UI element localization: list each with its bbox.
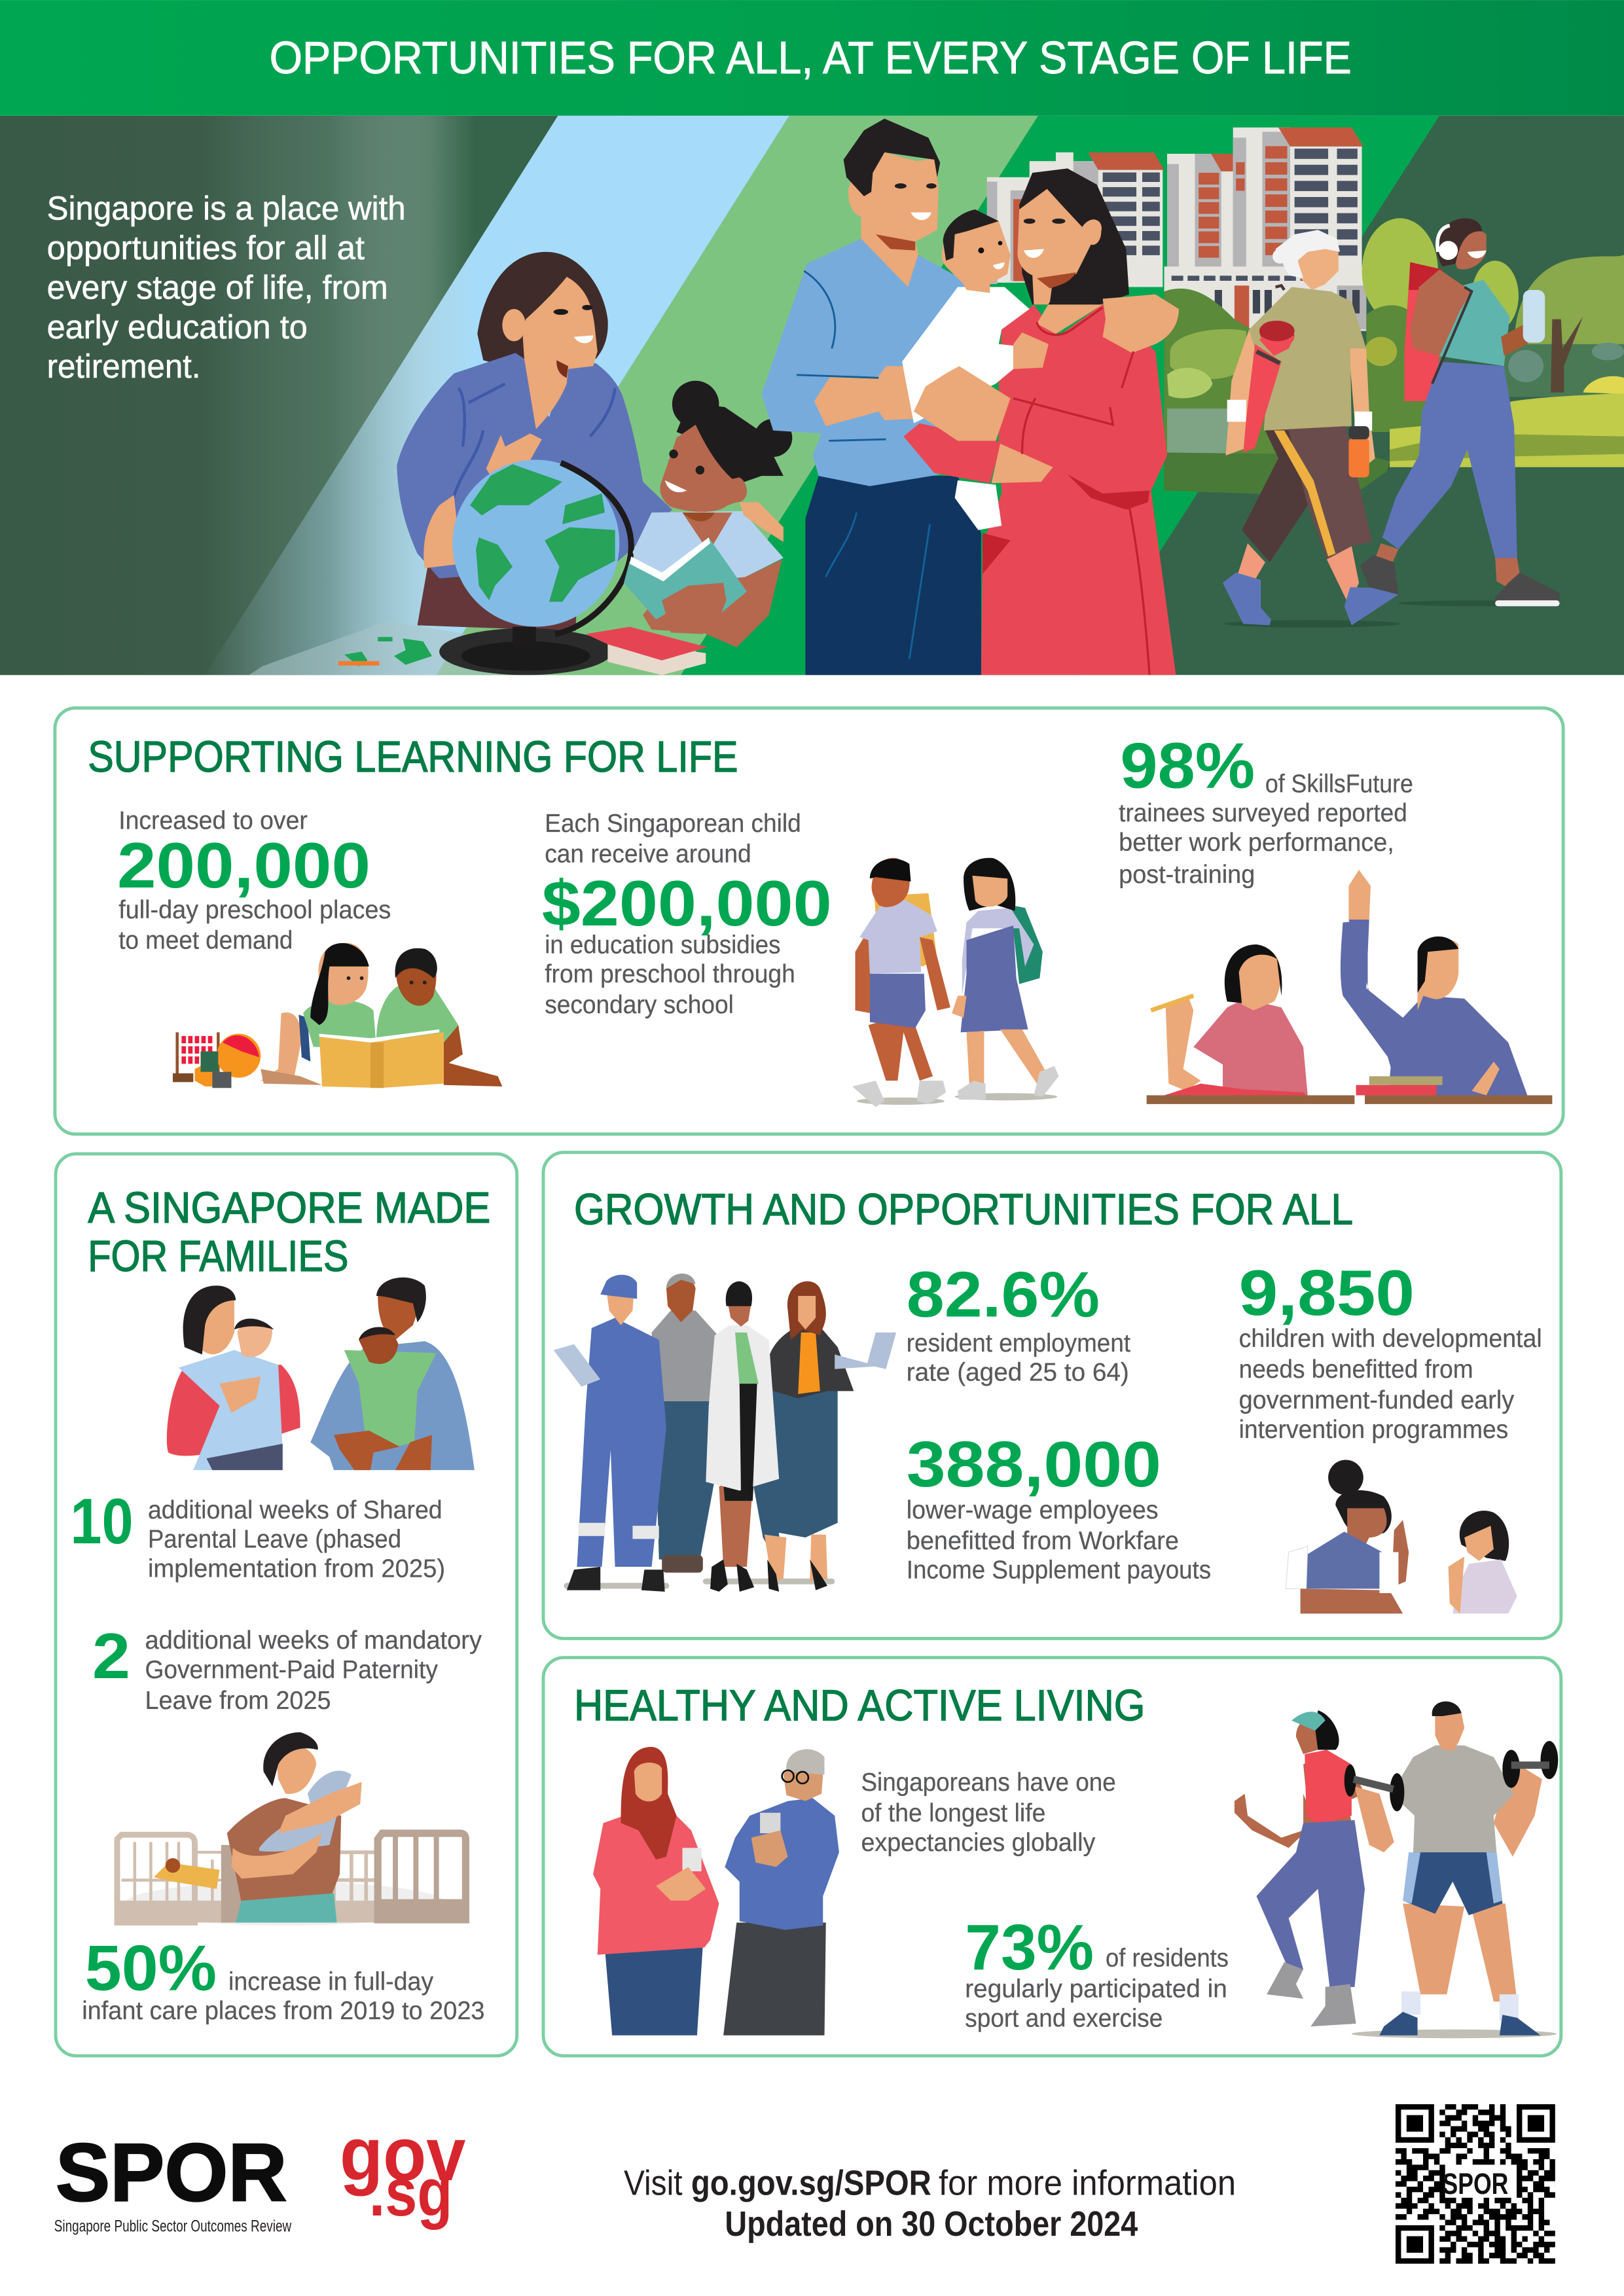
stat: preschool places	[117, 806, 391, 955]
stat: preschool places: Increased to over	[118, 806, 308, 834]
illustration: students walking	[852, 858, 1058, 1107]
QR code: SPOR	[1442, 2167, 1508, 2200]
heading: HEALTHY AND ACTIVE LIVING	[574, 1681, 1145, 1731]
stat: SkillsFuture: of SkillsFuture	[1265, 770, 1413, 798]
panel: supporting learning for life	[55, 708, 1563, 1134]
website note	[624, 2164, 1236, 2203]
stat: sport participation: of residents	[1106, 1945, 1229, 1973]
heading: SUPPORTING LEARNING FOR LIFE	[88, 732, 738, 781]
stat: employment rate: rate (aged 25 to 64)	[907, 1359, 1129, 1387]
footer	[54, 2104, 1561, 2264]
update date: Updated on 30 October 2024	[725, 2204, 1138, 2244]
stat: paternity leave: additional weeks of mandatory	[145, 1626, 482, 1655]
heading: GROWTH AND OPPORTUNITIES FOR ALL	[574, 1185, 1353, 1234]
stat: paternity leave: Government-Paid Paternity	[145, 1656, 438, 1684]
heading	[88, 1183, 490, 1281]
stat: SkillsFuture: 98%	[1120, 730, 1255, 802]
trees and park	[1164, 218, 1624, 495]
stat: sport participation: 73%	[965, 1911, 1094, 1983]
intro text: Singapore is a place with	[47, 189, 406, 227]
globe table map	[249, 621, 505, 675]
stat: employment rate	[907, 1258, 1130, 1387]
hero illustration panel	[0, 116, 1624, 675]
teacher	[397, 252, 672, 631]
stat: education subsidies: in education subsidies	[545, 931, 780, 959]
website note: for more information	[939, 2164, 1236, 2203]
stat: workfare: 388,000	[907, 1428, 1161, 1500]
stat: preschool places: 200,000	[117, 829, 370, 901]
stat: early intervention: 9,850	[1239, 1257, 1415, 1329]
stat: infant care places: increase in full-day	[228, 1967, 434, 1996]
stat: sport participation	[965, 1911, 1229, 2032]
QR code	[1396, 2104, 1561, 2264]
intro text: every stage of life, from	[47, 268, 388, 306]
stat: early intervention	[1239, 1257, 1542, 1444]
stat: shared parental leave: implementation from 2025)	[148, 1554, 445, 1583]
SPOR logo: Singapore Public Sector Outcomes Review	[54, 2217, 291, 2235]
intro text: early education to	[47, 308, 308, 346]
stat: life expectancy: expectancies globally	[861, 1829, 1096, 1857]
panel: growth and opportunities for all	[543, 1153, 1561, 1638]
stat: shared parental leave: additional weeks of Shared	[148, 1496, 442, 1524]
stat: education subsidies: can receive around	[545, 840, 751, 869]
buildings	[987, 128, 1366, 331]
stat: employment rate: 82.6%	[907, 1258, 1100, 1330]
stat: sport participation: sport and exercise	[965, 2004, 1163, 2032]
stat: education subsidies: $200,000	[542, 867, 832, 939]
stat: shared parental leave	[70, 1485, 445, 1583]
stat: workfare: benefitted from Workfare	[907, 1527, 1179, 1555]
gov.sg logo	[340, 2111, 466, 2230]
stat: life expectancy: of the longest life	[861, 1799, 1045, 1827]
stat: early intervention: children with developmental	[1239, 1325, 1542, 1353]
stat: workfare: lower-wage employees	[907, 1496, 1159, 1524]
stat: workfare	[907, 1428, 1211, 1585]
stat: preschool places: full-day preschool places	[118, 896, 391, 924]
stat: early intervention: intervention programmes	[1239, 1416, 1508, 1444]
illustration: children reading with toys	[173, 943, 502, 1088]
child reading book	[624, 381, 792, 647]
stat: education subsidies: secondary school	[545, 991, 734, 1019]
gov.sg logo: gov	[340, 2111, 466, 2197]
illustration: exercising with dumbbells	[1235, 1702, 1558, 2038]
panel: healthy and active living	[543, 1658, 1561, 2056]
older woman walking	[1223, 230, 1400, 628]
stat: shared parental leave: Parental Leave (phased	[148, 1526, 401, 1554]
panel: a Singapore made for families	[56, 1154, 517, 2056]
intro text: opportunities for all at	[47, 228, 365, 266]
website note: Visit	[624, 2164, 683, 2203]
illustration: seniors with phones	[593, 1747, 839, 2036]
stat: employment rate: resident employment	[907, 1329, 1130, 1357]
stat: education subsidies: Each Singaporean child	[545, 810, 801, 838]
intro text	[47, 189, 406, 385]
stat: SkillsFuture	[1119, 730, 1413, 889]
stat: early intervention: government-funded early	[1239, 1386, 1515, 1414]
stat: life expectancy: Singaporeans have one	[861, 1768, 1116, 1797]
stat: education subsidies: from preschool through	[545, 960, 795, 988]
illustration: mother and father with babies	[167, 1278, 475, 1470]
stat: paternity leave: Leave from 2025	[145, 1687, 331, 1715]
stat: early intervention: needs benefitted from	[1239, 1355, 1473, 1384]
SPOR logo: SPOR	[56, 2127, 287, 2219]
stat: education subsidies	[542, 810, 832, 1019]
stat: infant care places: infant care places from 2019 to 2023	[82, 1997, 484, 2025]
stat: preschool places: to meet demand	[118, 927, 293, 955]
stat: workfare: Income Supplement payouts	[907, 1556, 1211, 1585]
heading: FOR FAMILIES	[88, 1232, 348, 1281]
intro text: retirement.	[47, 347, 200, 385]
illustration: teacher and child	[1286, 1460, 1517, 1613]
heading: A SINGAPORE MADE	[88, 1183, 490, 1232]
stat: SkillsFuture: post-training	[1119, 861, 1255, 889]
illustration: adult learners at desks	[1147, 870, 1552, 1104]
gov.sg logo: .sg	[369, 2155, 452, 2230]
stat: SkillsFuture: trainees surveyed reported	[1119, 799, 1407, 827]
stat: SkillsFuture: better work performance,	[1119, 829, 1394, 857]
illustration: diverse workers	[554, 1274, 896, 1592]
stat: paternity leave	[92, 1620, 482, 1715]
jogger with backpack	[1360, 218, 1560, 606]
stat: sport participation: regularly participated in	[965, 1975, 1227, 2003]
stat: life expectancy	[861, 1768, 1116, 1857]
header banner	[0, 0, 1624, 116]
website note: go.gov.sg/SPOR	[691, 2164, 931, 2203]
stat: shared parental leave: 10	[70, 1485, 134, 1557]
title: OPPORTUNITIES FOR ALL, AT EVERY STAGE OF LIFE	[270, 32, 1352, 83]
stat: paternity leave: 2	[92, 1620, 130, 1692]
globe	[439, 460, 631, 675]
red book	[586, 627, 708, 675]
stat: infant care places: 50%	[85, 1931, 217, 2003]
stat: infant care places	[82, 1931, 484, 2025]
father	[761, 118, 984, 675]
illustration: caregiver with baby and cribs	[117, 1732, 465, 1926]
mother in red with baby	[902, 168, 1179, 675]
